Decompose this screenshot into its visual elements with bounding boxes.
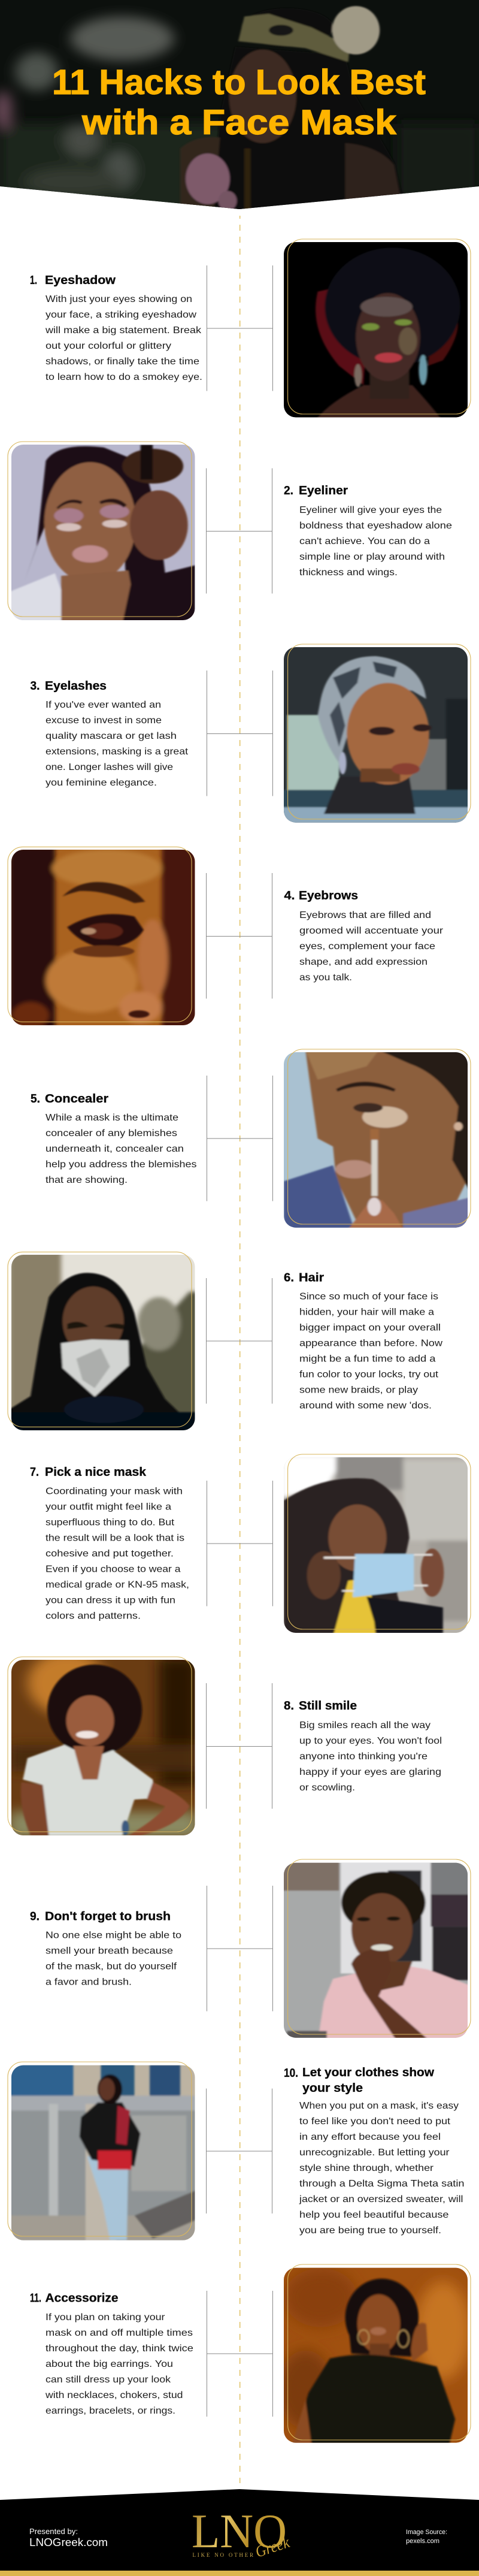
panel: 3 eyelashes bbox=[30, 644, 471, 825]
body text bbox=[46, 1113, 196, 1185]
body text bbox=[46, 1486, 189, 1621]
logo: LNO bbox=[192, 2505, 287, 2558]
body text: help you feel beautiful because bbox=[299, 2210, 449, 2220]
heading: your style bbox=[302, 2082, 363, 2095]
photo: concealer bbox=[281, 1050, 471, 1230]
title: with a Face Mask bbox=[81, 103, 397, 142]
body text: shape, and add expression bbox=[299, 957, 428, 967]
heading: Still smile bbox=[299, 1699, 357, 1713]
heading: 2. bbox=[284, 484, 293, 497]
body text: that are showing. bbox=[46, 1175, 128, 1185]
connector bbox=[207, 1076, 273, 1201]
connector bbox=[207, 1886, 273, 2011]
heading: Don't forget to brush bbox=[45, 1910, 171, 1923]
footer bbox=[0, 2489, 479, 2576]
heading: 11. bbox=[30, 2291, 41, 2305]
body text bbox=[45, 294, 202, 382]
frame bbox=[8, 1252, 192, 1427]
body text: as you talk. bbox=[299, 973, 352, 983]
body text: anyone into thinking you're bbox=[299, 1751, 428, 1762]
body text: jacket or an oversized sweater, will bbox=[299, 2194, 463, 2204]
heading: Accessorize bbox=[46, 2291, 119, 2305]
body text: superfluous thing to do. But bbox=[46, 1517, 175, 1528]
panel: 10 let your clothes show your style bbox=[8, 2061, 465, 2245]
heading: 6. bbox=[284, 1272, 294, 1285]
connector bbox=[206, 469, 272, 593]
photo: hair and mask bbox=[9, 1252, 199, 1433]
heading: 7. bbox=[30, 1466, 39, 1479]
heading: Eyelashes bbox=[45, 680, 107, 693]
body text bbox=[46, 700, 189, 788]
frame bbox=[288, 2264, 471, 2440]
body text: of the mask, but do yourself bbox=[46, 1962, 177, 1971]
heading: 1. bbox=[30, 274, 37, 287]
frame bbox=[288, 239, 471, 414]
body text bbox=[299, 1720, 442, 1793]
body text: in any effort because you feel bbox=[299, 2132, 441, 2142]
connector bbox=[207, 1481, 273, 1606]
body text: When you put on a mask, it's easy bbox=[299, 2101, 459, 2111]
body text: eyes, complement your face bbox=[299, 941, 435, 952]
body text: fun color to your locks, try out bbox=[299, 1370, 439, 1379]
body text: can still dress up your look bbox=[46, 2375, 171, 2385]
photo: putting on mask bbox=[281, 1455, 471, 1637]
body text: to feel like you don't need to put bbox=[299, 2116, 451, 2127]
frame bbox=[8, 847, 192, 1022]
photo: smiling woman bbox=[9, 1651, 199, 1838]
body text: hidden, your hair will make a bbox=[299, 1307, 434, 1317]
body text: mask on and off multiple times bbox=[46, 2328, 193, 2338]
panel: 5 concealer bbox=[31, 1049, 471, 1230]
body text: bigger impact on your overall bbox=[299, 1323, 441, 1333]
heading: Hair bbox=[299, 1272, 324, 1285]
footer background bbox=[0, 2489, 479, 2576]
panel: 4 eyebrows bbox=[8, 847, 444, 1029]
presented by bbox=[29, 2527, 108, 2548]
body text: with necklaces, chokers, stud bbox=[45, 2390, 183, 2400]
presented by: Presented by: bbox=[29, 2527, 78, 2536]
body text: extensions, masking is a great bbox=[46, 747, 189, 757]
heading: 5. bbox=[31, 1092, 40, 1106]
body text: through a Delta Sigma Theta satin bbox=[299, 2179, 465, 2189]
logo: Greek bbox=[253, 2533, 292, 2561]
body text: excuse to invest in some bbox=[46, 715, 162, 726]
body text: happy if your eyes are glaring bbox=[299, 1767, 441, 1777]
body text: or scowling. bbox=[299, 1783, 355, 1793]
body text: up to your eyes. You won't fool bbox=[299, 1736, 442, 1746]
body text: will make a big statement. Break bbox=[45, 325, 202, 336]
body text: No one else might be able to bbox=[46, 1931, 181, 1940]
heading: Concealer bbox=[45, 1092, 108, 1106]
connector bbox=[207, 265, 273, 391]
body text: can't achieve. You can do a bbox=[299, 536, 430, 546]
body text: While a mask is the ultimate bbox=[46, 1113, 178, 1123]
frame bbox=[288, 644, 471, 819]
connector bbox=[206, 873, 272, 998]
panel: 8 still smile bbox=[8, 1651, 442, 1838]
body text bbox=[299, 1292, 443, 1411]
body text: Eyeliner will give your eyes the bbox=[299, 505, 442, 515]
heading: 4. bbox=[284, 889, 295, 902]
body text: you are being true to yourself. bbox=[299, 2225, 441, 2236]
heading: Eyebrows bbox=[299, 889, 358, 902]
body text: style shine through, whether bbox=[299, 2163, 434, 2173]
body text: throughout the day, think twice bbox=[46, 2344, 193, 2354]
body text: some new braids, or play bbox=[299, 1385, 418, 1395]
logo: LIKE NO OTHER bbox=[193, 2552, 253, 2558]
body text bbox=[46, 1931, 181, 1987]
body text: Eyebrows that are filled and bbox=[299, 910, 431, 920]
heading bbox=[284, 1272, 324, 1285]
panel: 7 pick a nice mask bbox=[30, 1454, 471, 1637]
body text: a favor and brush. bbox=[46, 1977, 132, 1987]
body text: the result will be a look that is bbox=[46, 1533, 184, 1544]
photo: eyeliner bbox=[9, 442, 199, 624]
body text: to learn how to do a smokey eye. bbox=[46, 372, 202, 382]
panel: 1 eyeshadow bbox=[30, 239, 471, 421]
body text: underneath it, concealer can bbox=[46, 1144, 184, 1154]
image source: Image Source: bbox=[406, 2529, 447, 2536]
photo: woman with hoop earrings bbox=[278, 2265, 471, 2445]
body text: around with some new 'dos. bbox=[299, 1401, 432, 1411]
body text: quality mascara or get lash bbox=[46, 731, 177, 741]
footer gold bar bbox=[0, 2571, 479, 2576]
body text: Even if you choose to wear a bbox=[46, 1564, 181, 1575]
body text: colors and patterns. bbox=[46, 1611, 141, 1621]
body text: concealer of any blemishes bbox=[46, 1128, 177, 1138]
body text: Coordinating your mask with bbox=[46, 1486, 183, 1497]
title bbox=[52, 63, 426, 142]
photo: satin jacket bbox=[9, 2061, 199, 2245]
body text: smell your breath because bbox=[46, 1946, 173, 1956]
body text: help you address the blemishes bbox=[46, 1159, 196, 1170]
body text: thickness and wings. bbox=[299, 567, 398, 578]
connector bbox=[206, 2089, 272, 2213]
panel: 2 eyeliner bbox=[8, 442, 452, 624]
title: 11 Hacks to Look Best bbox=[52, 63, 426, 102]
body text: about the big earrings. You bbox=[46, 2359, 173, 2369]
connector bbox=[207, 2291, 273, 2417]
body text: out your colorful or glittery bbox=[46, 341, 171, 351]
frame bbox=[8, 442, 192, 617]
body text: you can dress it up with fun bbox=[46, 1595, 175, 1606]
body text: If you've ever wanted an bbox=[46, 700, 161, 710]
heading: Eyeliner bbox=[299, 484, 348, 497]
body text: simple line or play around with bbox=[299, 552, 445, 562]
connector bbox=[206, 1683, 272, 1808]
body text: Since so much of your face is bbox=[299, 1292, 438, 1301]
photo: brushing teeth bbox=[281, 1860, 471, 2042]
frame bbox=[8, 2062, 192, 2236]
image source bbox=[406, 2529, 447, 2545]
heading bbox=[284, 2066, 434, 2095]
central dashed timeline bbox=[240, 216, 241, 2483]
heading: Pick a nice mask bbox=[45, 1466, 147, 1479]
photo: eyeshadow bbox=[284, 239, 470, 421]
body text bbox=[299, 505, 452, 578]
heading: 10. bbox=[284, 2067, 298, 2080]
frame bbox=[8, 1657, 192, 1832]
body text: cohesive and put together. bbox=[46, 1548, 174, 1559]
body text: your outfit might feel like a bbox=[46, 1502, 171, 1512]
heading: 8. bbox=[284, 1699, 294, 1713]
presented by: LNOGreek.com bbox=[29, 2536, 108, 2548]
body text bbox=[299, 2101, 465, 2236]
photo: eyelashes bbox=[281, 645, 471, 825]
connector bbox=[206, 1278, 272, 1403]
body text bbox=[299, 910, 444, 983]
heading: 3. bbox=[30, 680, 40, 693]
frame bbox=[288, 1049, 471, 1224]
body text: unrecognizable. But letting your bbox=[299, 2148, 450, 2158]
body text: one. Longer lashes will give bbox=[46, 762, 173, 772]
body text: your face, a striking eyeshadow bbox=[46, 310, 196, 320]
heading: Let your clothes show bbox=[302, 2066, 434, 2079]
panel: 11 accessorize bbox=[30, 2264, 471, 2445]
panel: 9 don't forget to brush bbox=[30, 1859, 471, 2042]
body text: boldness that eyeshadow alone bbox=[299, 521, 452, 531]
body text: shadows, or finally take the time bbox=[46, 357, 199, 367]
body text bbox=[45, 2312, 193, 2416]
header banner photo bbox=[0, 0, 479, 212]
image source: pexels.com bbox=[406, 2538, 439, 2545]
body text: appearance than before. Now bbox=[299, 1339, 443, 1348]
panel: 6 hair bbox=[8, 1252, 443, 1433]
body text: might be a fun time to add a bbox=[299, 1354, 436, 1364]
heading: 9. bbox=[30, 1910, 40, 1923]
body text: With just your eyes showing on bbox=[46, 294, 192, 304]
body text: Big smiles reach all the way bbox=[299, 1720, 431, 1731]
frame bbox=[288, 1454, 471, 1629]
frame bbox=[288, 1859, 471, 2034]
body text: If you plan on taking your bbox=[46, 2312, 165, 2323]
body text: medical grade or KN-95 mask, bbox=[46, 1580, 189, 1590]
photo: eyebrows bbox=[9, 847, 199, 1029]
body text: earrings, bracelets, or rings. bbox=[46, 2406, 175, 2416]
body text: you feminine elegance. bbox=[46, 778, 157, 788]
body text: groomed will accentuate your bbox=[299, 926, 444, 936]
heading: Eyeshadow bbox=[45, 274, 116, 287]
connector bbox=[207, 671, 273, 796]
